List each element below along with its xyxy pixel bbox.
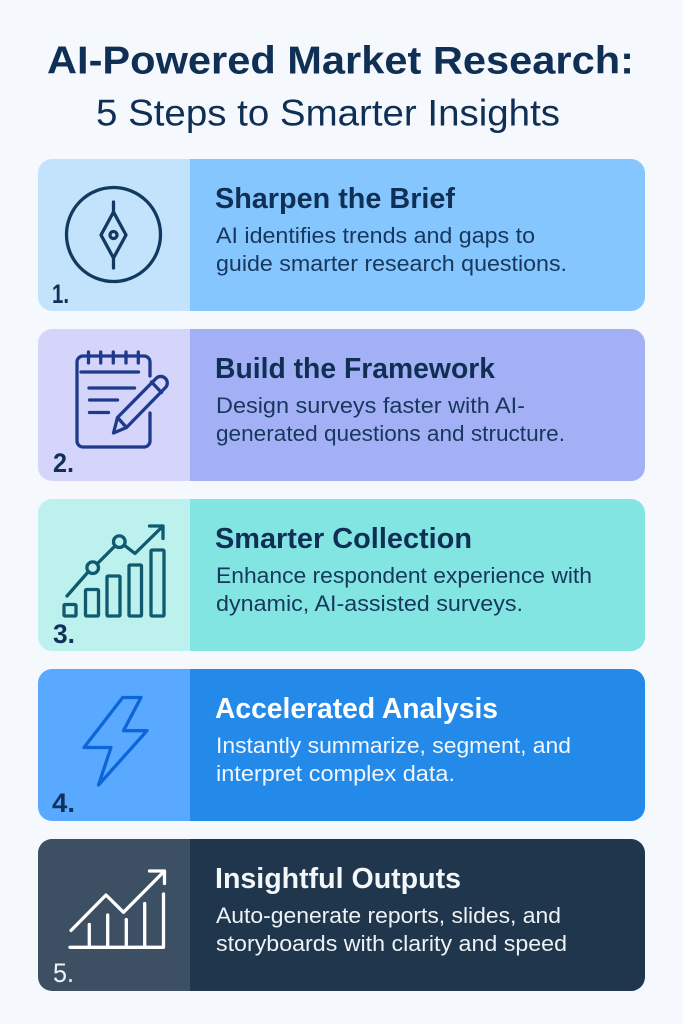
heading: insightful outputs: Insightful Outputs bbox=[215, 863, 461, 895]
text: description 4: Instantly summarize, segment, and bbox=[216, 733, 571, 758]
heading: smarter collection: Smarter Collection bbox=[215, 523, 472, 555]
title: 5 Steps to Smarter Insights bbox=[96, 92, 560, 134]
step number 1: 1. bbox=[52, 279, 69, 309]
text: description 2 bbox=[216, 393, 565, 446]
icon: notepad and pencil bbox=[77, 352, 167, 447]
heading: accelerated analysis: Accelerated Analysis bbox=[215, 693, 498, 725]
icon: lightning bolt bbox=[84, 698, 147, 785]
panel: step 2 build the framework bbox=[38, 329, 645, 481]
panel: step 1 sharpen the brief bbox=[38, 159, 645, 311]
text: description 4 bbox=[216, 733, 571, 786]
text: description 5: Auto-generate reports, slides, and bbox=[216, 903, 561, 928]
text: description 1 bbox=[216, 223, 567, 276]
text: description 1: guide smarter research questions. bbox=[216, 251, 567, 276]
text: description 3 bbox=[216, 563, 592, 616]
icon: bar chart with rising arrow bbox=[70, 871, 164, 947]
icon: compass bbox=[66, 188, 160, 282]
text: description 2: Design surveys faster with AI- bbox=[216, 393, 525, 418]
text: description 4: interpret complex data. bbox=[216, 761, 455, 786]
step number 5: 5. bbox=[53, 958, 74, 988]
heading: build the framework: Build the Framework bbox=[215, 353, 495, 385]
panel: step 4 accelerated analysis bbox=[38, 669, 645, 821]
icon: growth bars with trend line bbox=[64, 526, 164, 616]
heading: sharpen the brief: Sharpen the Brief bbox=[215, 183, 456, 215]
title: AI-Powered Market Research: bbox=[47, 40, 634, 82]
step number 2: 2. bbox=[53, 448, 74, 478]
text: description 2: generated questions and structure. bbox=[216, 421, 565, 446]
step number 4: 4. bbox=[52, 788, 75, 818]
step number 3: 3. bbox=[53, 619, 75, 649]
panel: step 3 smarter collection bbox=[38, 499, 645, 651]
text: description 5 bbox=[216, 903, 567, 956]
text: description 1: AI identifies trends and gaps to bbox=[216, 223, 535, 248]
text: description 5: storyboards with clarity and speed bbox=[216, 931, 567, 956]
title bbox=[47, 40, 634, 134]
panel: step 5 insightful outputs bbox=[38, 839, 645, 991]
text: description 3: dynamic, AI-assisted surveys. bbox=[216, 591, 523, 616]
text: description 3: Enhance respondent experience with bbox=[216, 563, 592, 588]
